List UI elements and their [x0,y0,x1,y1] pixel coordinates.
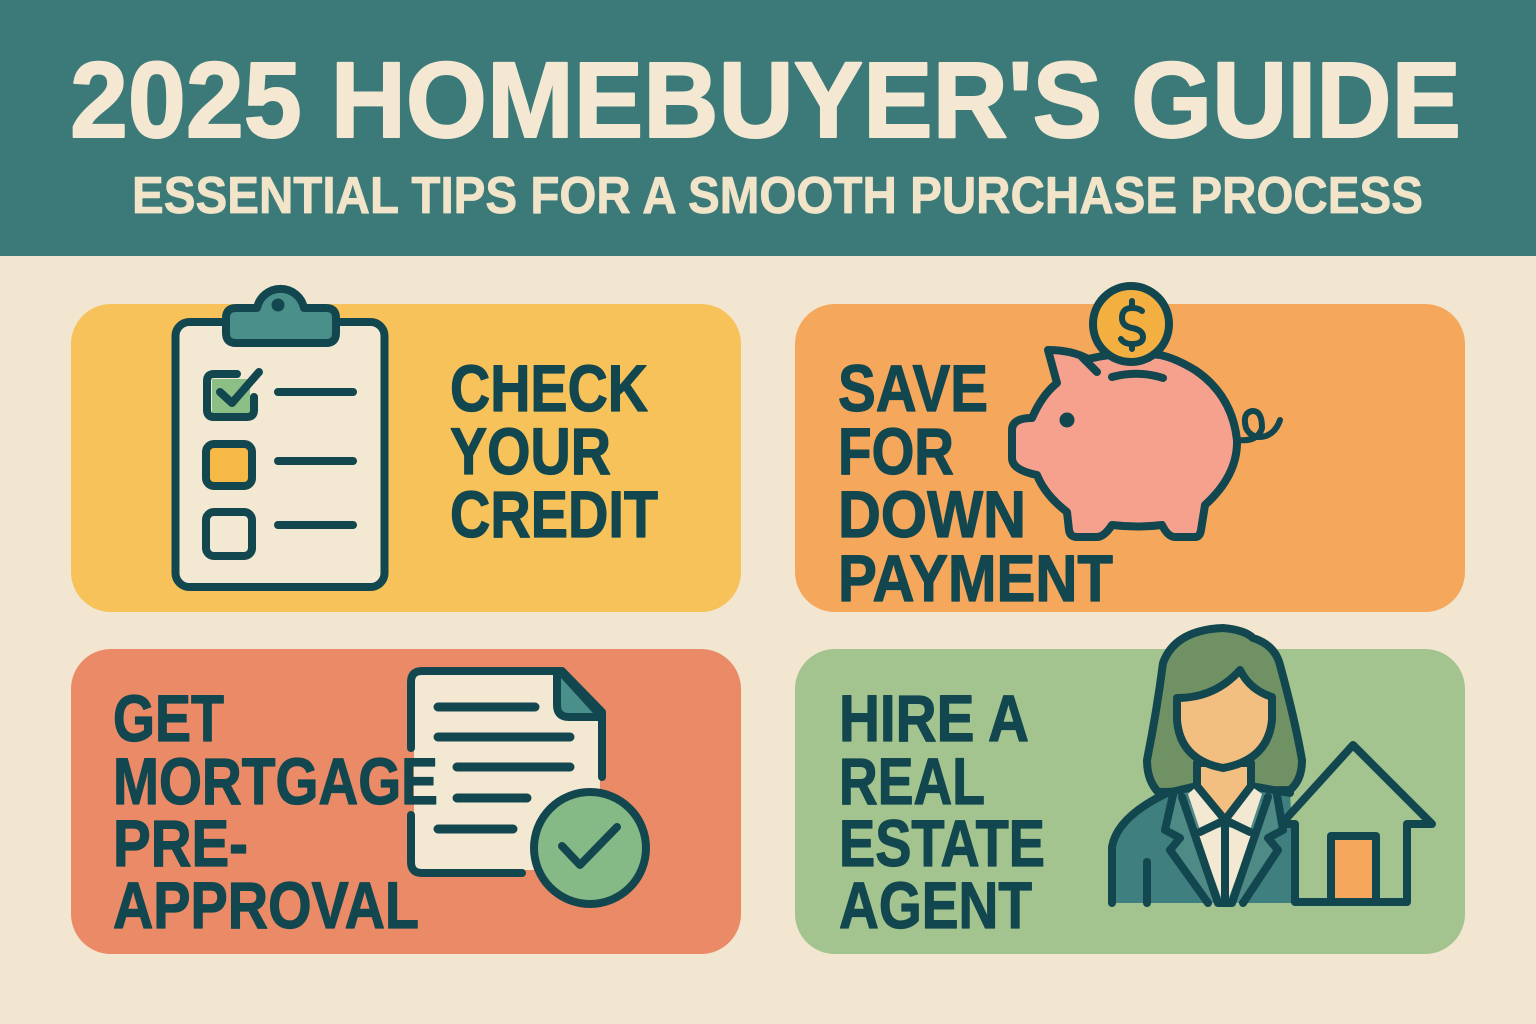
header banner [0,0,1536,256]
panel: check your credit [71,289,741,612]
panel: hire a real estate agent [795,628,1465,954]
label: GET [113,681,224,755]
label: REAL [839,744,985,818]
label: FOR [838,414,954,488]
icon: piggy bank with coin [1012,286,1280,537]
label: SAVE [838,351,988,425]
label: APPROVAL [113,868,419,942]
panel: get mortgage pre-approval [71,649,741,954]
panel: save for down payment [795,286,1465,615]
label: CHECK [450,351,648,425]
icon: clipboard checklist [176,289,384,587]
title: 2025 HOMEBUYER'S GUIDE [70,39,1461,160]
label: ESTATE [839,806,1045,880]
label: YOUR [450,414,611,488]
label: HIRE A [839,681,1029,755]
label [113,681,438,942]
label [838,351,1113,615]
label: AGENT [839,868,1032,942]
icon: document with check badge [411,671,646,904]
label: MORTGAGE [113,744,438,818]
label: CREDIT [450,477,658,551]
subtitle: ESSENTIAL TIPS FOR A SMOOTH PURCHASE PROCESS [132,167,1423,225]
label: PAYMENT [838,541,1113,615]
label [839,681,1045,942]
icon: agent with house [1112,628,1432,903]
label: PRE- [113,806,248,880]
label [450,351,658,551]
label: DOWN [838,477,1026,551]
